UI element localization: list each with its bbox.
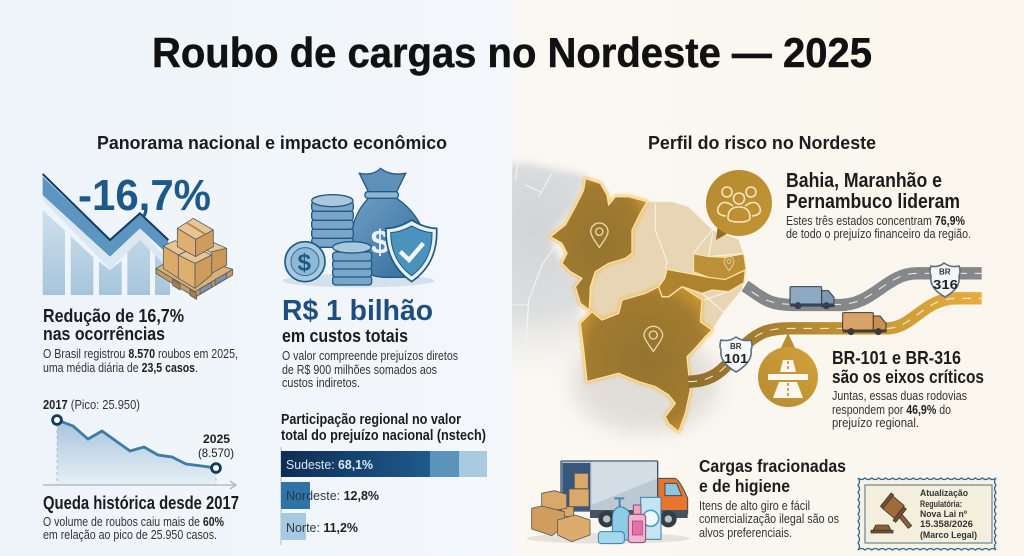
icon: truck with boxes and hygiene products	[527, 461, 690, 544]
icon: grey truck	[790, 287, 834, 309]
icon: highway badge	[758, 333, 818, 407]
heading: regional share: Participação regional no valor	[281, 412, 461, 428]
text: critical highways body: respondem por 46,9% do	[832, 403, 951, 417]
text: historic drop body	[43, 515, 224, 542]
text: regulatory update: 15.358/2026	[920, 519, 973, 530]
heading: regional share: total do prejuízo nacional (nstech)	[281, 428, 486, 444]
text: total cost body: O valor compreende prejuízos diretos	[282, 349, 458, 363]
icon: BR 316 shield: BR	[939, 268, 951, 276]
title: Roubo de cargas no Nordeste — 2025	[152, 29, 872, 76]
icon: money bag, coins and shield: $	[298, 249, 311, 276]
icon: money bag, coins and shield: $	[371, 224, 390, 261]
heading: regional share	[281, 412, 486, 444]
heading: cargo types: e de higiene	[699, 476, 790, 496]
map: Nordeste states	[499, 160, 747, 433]
text: regulatory update: Nova Lai nº	[920, 509, 967, 520]
icon: BR 316 shield: 316	[933, 277, 958, 292]
text: leading states body: Estes três estados concentram 76,9%	[786, 214, 965, 228]
bar chart: Sudeste: 68,1%	[286, 457, 373, 472]
text: reduction body: O Brasil registrou 8.570 roubos em 2025,	[43, 347, 238, 361]
heading: critical highways	[832, 347, 984, 387]
icon: gavel	[871, 493, 912, 533]
text: regulatory update	[920, 488, 977, 541]
heading: critical highways: BR-101 e BR-316	[832, 347, 961, 368]
text: reduction body	[43, 347, 238, 375]
bar chart: Norte: 11,2%	[286, 520, 358, 535]
text: regulatory update: Regulatória:	[920, 499, 962, 510]
heading: historic drop: Queda histórica desde 2017	[43, 493, 239, 513]
text: regulatory update: (Marco Legal)	[920, 530, 977, 541]
heading: leading states: Pernambuco lideram	[786, 190, 960, 213]
text: cargo types body: Itens de alto giro e fácil	[699, 499, 810, 513]
roads: BR-316 and BR-101	[688, 273, 982, 382]
icon: BR 101 shield: 101	[724, 351, 748, 366]
big number: 1 billion: R$ 1 bilhão	[282, 295, 433, 327]
text: reduction body: uma média diária de 23,5 casos.	[43, 361, 198, 375]
callout: critical highways	[758, 333, 984, 430]
text: historic drop body: em relação ao pico de 25.950 casos.	[43, 528, 217, 542]
text: critical highways body: Juntas, essas duas rodovias	[832, 389, 967, 403]
stamp: regulatory update	[858, 478, 996, 550]
text: total cost body: custos indiretos.	[282, 376, 360, 390]
panel: regional share	[280, 412, 487, 545]
text: regulatory update: Atualização	[920, 488, 968, 499]
line chart 2017 to 2025	[43, 398, 236, 489]
text: critical highways body: prejuízo regional.	[832, 416, 919, 430]
bar chart: Nordeste: 12,8%	[286, 488, 379, 503]
callout: leading states	[706, 169, 971, 241]
icon: money bag, coins and shield	[282, 168, 437, 287]
right section heading: Perfil do risco no Nordeste	[648, 132, 876, 153]
bar chart	[280, 447, 487, 545]
panel: total cost	[282, 168, 458, 390]
text: total cost body	[282, 349, 458, 390]
heading: reduction: Redução de 16,7%	[43, 306, 184, 326]
icon: orange truck	[843, 313, 886, 335]
text: critical highways body	[832, 389, 967, 430]
icon: BR 101 shield	[720, 337, 752, 372]
left section heading: Panorama nacional e impacto econômico	[97, 132, 447, 153]
heading: cargo types: Cargas fracionadas	[699, 456, 846, 476]
line chart 2017 to 2025: 2017 (Pico: 25.950)	[43, 398, 140, 412]
line chart 2017 to 2025: (8.570)	[198, 446, 234, 460]
heading: cargo types	[699, 456, 846, 496]
text: cargo types body: alvos preferenciais.	[699, 526, 792, 540]
heading: leading states: Bahia, Maranhão e	[786, 169, 942, 192]
heading: leading states	[786, 169, 960, 213]
heading: reduction	[43, 306, 184, 344]
text: cargo types body: comercialização ilegal são os	[699, 512, 839, 526]
heading: total cost: em custos totais	[282, 326, 408, 346]
text: leading states body: de todo o prejuízo financeiro da região.	[786, 227, 971, 241]
panel: cargo types	[527, 456, 846, 544]
icon: falling arrow chart	[43, 174, 170, 295]
panel: historic drop	[43, 398, 239, 542]
text: cargo types body	[699, 499, 839, 540]
big number: -16,7%	[78, 171, 211, 220]
icon: BR 101 shield: BR	[730, 342, 742, 351]
icon: pallet of boxes	[156, 218, 233, 299]
text: historic drop body: O volume de roubos caiu mais de 60%	[43, 515, 224, 529]
icon: people badge	[706, 170, 772, 240]
heading: reduction: nas ocorrências	[43, 324, 165, 344]
icon: BR 316 shield	[930, 263, 960, 297]
text: total cost body: de R$ 900 milhões somados aos	[282, 363, 437, 377]
heading: critical highways: são os eixos críticos	[832, 366, 984, 387]
text: leading states body	[786, 214, 971, 241]
panel: reduction	[43, 171, 238, 375]
line chart 2017 to 2025: 2025	[203, 432, 230, 446]
